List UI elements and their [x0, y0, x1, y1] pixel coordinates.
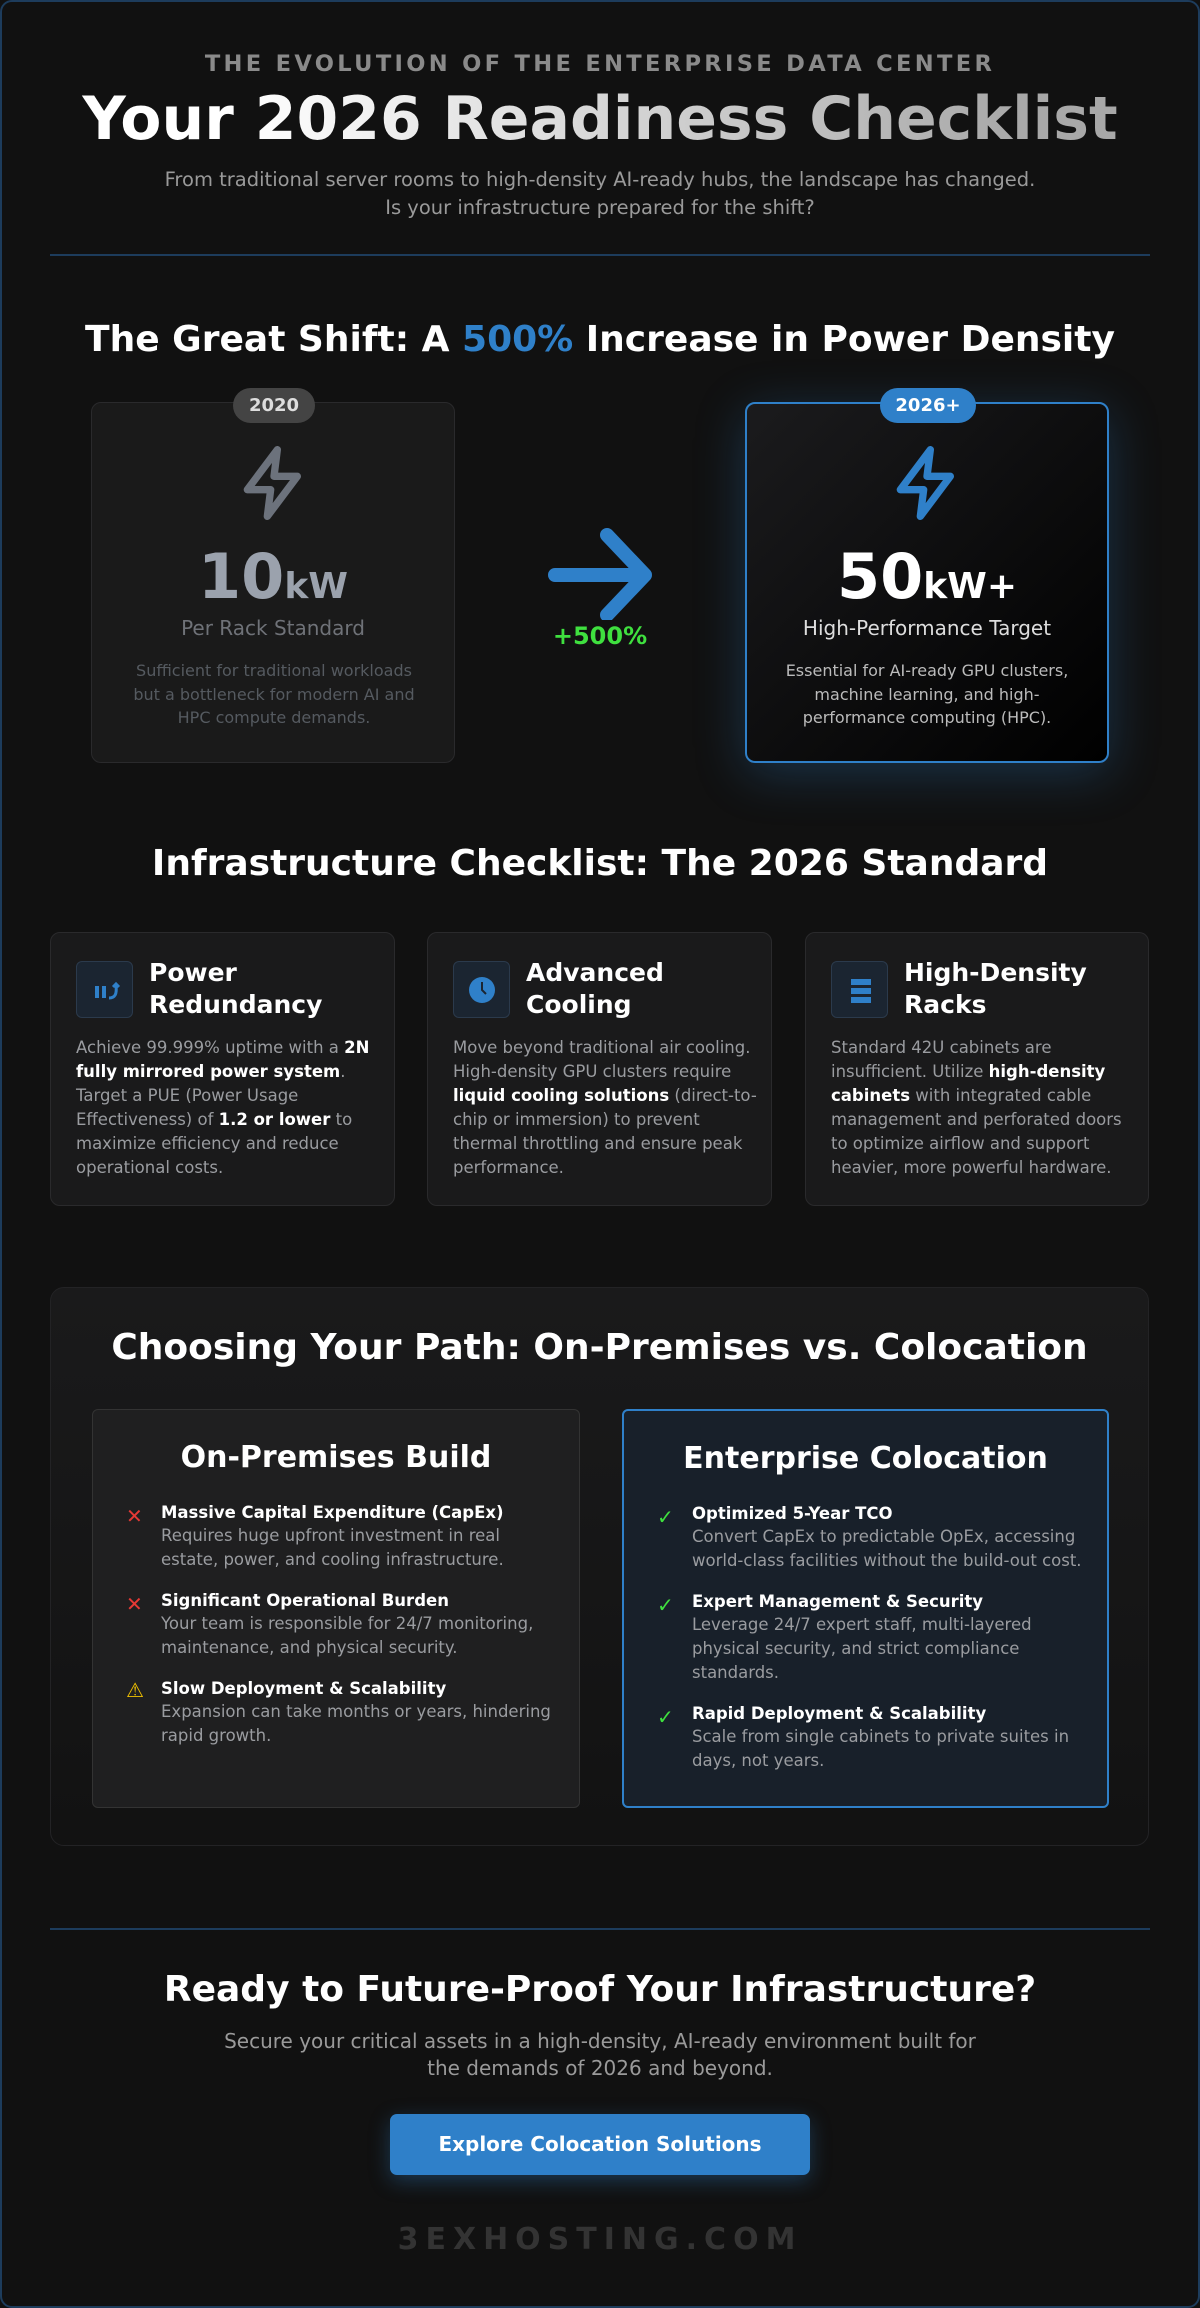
- item: capex: Massive Capital Expenditure (CapEx): [161, 1503, 504, 1522]
- card: high-density racks: High-Density: [904, 958, 1087, 987]
- item: capex: estate, power, and cooling infrastructure.: [161, 1550, 504, 1569]
- item: burden: Significant Operational Burden: [161, 1591, 449, 1610]
- cta text: the demands of 2026 and beyond.: [427, 2056, 773, 2080]
- item: management: ✓: [657, 1593, 674, 1617]
- item: slow: [126, 1678, 551, 1745]
- badge 2026+: 2026+: [895, 395, 961, 416]
- value 50kW+: 50kW+: [837, 540, 1017, 613]
- icon: bolt blue: [896, 446, 954, 520]
- item: capex: [126, 1503, 504, 1569]
- value 10kW: 10kW: [198, 540, 348, 613]
- item: tco: Convert CapEx to predictable OpEx, accessing: [692, 1527, 1075, 1546]
- card: advanced cooling: Move beyond traditional air cooling. High-density GPU clusters require liquid cooling solutions (direct-to-chip or immersion) to prevent thermal throttling and ensure peak performance.: [453, 1038, 757, 1177]
- card: power redundancy: Achieve 99.999% uptime with a 2N fully mirrored power system. Target a PUE (Power Usage Effectiveness) of 1.2 or lower to maximize efficiency and reduce operational costs.: [76, 1038, 369, 1177]
- arrow: [548, 528, 652, 650]
- item: rapid: Rapid Deployment & Scalability: [692, 1704, 986, 1723]
- item: rapid: days, not years.: [692, 1751, 824, 1770]
- item: capex: ✕: [126, 1504, 143, 1528]
- heading: checklist: Infrastructure Checklist: The 2026 Standard: [152, 843, 1048, 884]
- box: colocation: Enterprise Colocation: [683, 1441, 1048, 1476]
- item: burden: Your team is responsible for 24/7 monitoring,: [161, 1614, 533, 1633]
- card: advanced cooling: [427, 932, 772, 1206]
- footer brand: 3EXHOSTING.COM: [398, 2222, 802, 2257]
- desc: Sufficient for traditional workloads but a bottleneck for modern AI and HPC compute demands.: [133, 661, 415, 727]
- item: slow: Expansion can take months or years, hindering: [161, 1702, 551, 1721]
- item: burden: maintenance, and physical security.: [161, 1638, 458, 1657]
- item: tco: [657, 1504, 1082, 1570]
- icon: power: [76, 961, 133, 1018]
- cta text: [224, 2029, 976, 2080]
- item: slow: rapid growth.: [161, 1726, 271, 1745]
- eyebrow: THE EVOLUTION OF THE ENTERPRISE DATA CENTER: [205, 51, 995, 77]
- item: management: Leverage 24/7 expert staff, multi-layered: [692, 1615, 1032, 1634]
- box: on-premises: [92, 1409, 580, 1808]
- item: rapid: [657, 1704, 1069, 1770]
- item: management: [657, 1592, 1032, 1682]
- label: Per Rack Standard: [181, 616, 365, 640]
- icon: rack: [831, 961, 888, 1018]
- cta heading: Ready to Future-Proof Your Infrastructure?: [164, 1969, 1036, 2010]
- item: management: Expert Management & Security: [692, 1592, 983, 1611]
- button: [390, 2114, 810, 2175]
- panel: choosing path: [50, 1287, 1149, 1846]
- button: Explore Colocation Solutions: [438, 2132, 762, 2156]
- heading: Choosing Your Path: On-Premises vs. Colocation: [111, 1327, 1088, 1368]
- card: advanced cooling: Advanced: [526, 958, 664, 987]
- item: tco: world-class facilities without the build-out cost.: [692, 1551, 1082, 1570]
- card: advanced cooling: Cooling: [526, 990, 632, 1019]
- card: high-density racks: [805, 932, 1149, 1206]
- badge 2026+: [880, 388, 976, 423]
- item: slow: Slow Deployment & Scalability: [161, 1679, 446, 1698]
- panel: 2020: [91, 402, 455, 763]
- cta text: Secure your critical assets in a high-density, AI-ready environment built for: [224, 2029, 976, 2053]
- intro text: From traditional server rooms to high-density AI-ready hubs, the landscape has changed.: [165, 168, 1035, 191]
- box: on-premises: On-Premises Build: [181, 1440, 491, 1475]
- item: management: physical security, and strict compliance: [692, 1639, 1019, 1658]
- item: tco: Optimized 5-Year TCO: [692, 1504, 893, 1523]
- item: tco: ✓: [657, 1505, 674, 1529]
- card: high-density racks: Standard 42U cabinets are insufficient. Utilize high-density cabinets with integrated cable management and perforated doors to optimize airflow and support heavier, more powerful hardware.: [831, 1038, 1122, 1177]
- desc: Essential for AI-ready GPU clusters, machine learning, and high-performance computing (HPC).: [786, 661, 1068, 727]
- +500% label: +500%: [553, 622, 647, 650]
- item: rapid: ✓: [657, 1705, 674, 1729]
- box: colocation: [622, 1409, 1109, 1808]
- card: power redundancy: [50, 932, 395, 1206]
- item: rapid: Scale from single cabinets to private suites in: [692, 1727, 1069, 1746]
- heading: great shift: The Great Shift: A 500% Increase in Power Density: [85, 319, 1115, 360]
- item: slow: ⚠: [126, 1678, 144, 1702]
- item: management: standards.: [692, 1663, 779, 1682]
- badge 2020: 2020: [249, 395, 299, 416]
- intro text: [165, 168, 1035, 219]
- icon: bolt gray: [244, 446, 301, 520]
- item: burden: ✕: [126, 1592, 143, 1616]
- item: capex: Requires huge upfront investment in real: [161, 1526, 500, 1545]
- panel: 2026+: [745, 402, 1109, 763]
- label: High-Performance Target: [803, 616, 1051, 640]
- title: Your 2026 Readiness Checklist: [82, 84, 1118, 154]
- intro text: Is your infrastructure prepared for the shift?: [385, 196, 815, 219]
- item: burden: [126, 1591, 533, 1657]
- card: power redundancy: Power: [149, 958, 237, 987]
- badge 2020: [233, 388, 315, 423]
- card: high-density racks: Racks: [904, 990, 986, 1019]
- icon: clock: [453, 961, 510, 1018]
- card: power redundancy: Redundancy: [149, 990, 322, 1019]
